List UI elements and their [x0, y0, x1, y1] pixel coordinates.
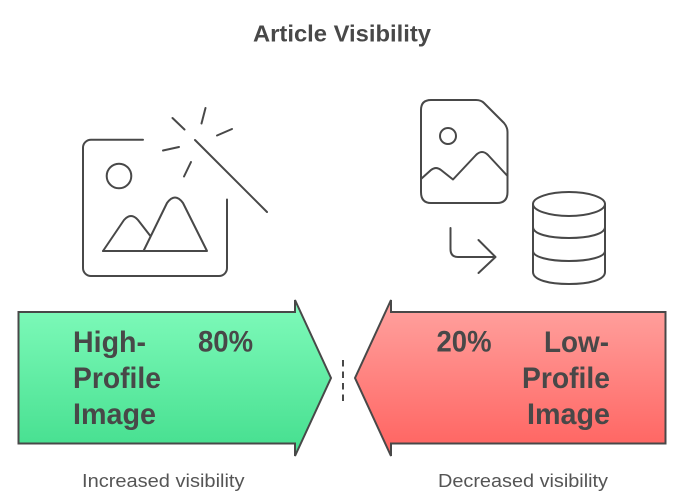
icon: image file	[421, 100, 508, 203]
icon: bent arrow	[450, 228, 496, 273]
icon: image with sparkle	[83, 108, 267, 276]
icon: database	[533, 192, 605, 284]
label: high-profile image: Profile	[73, 362, 161, 395]
caption: decreased visibility: Decreased visibility	[438, 471, 608, 491]
value: 20%: 20%	[436, 326, 492, 358]
center dashed divider	[342, 360, 344, 403]
label: low-profile image: Profile	[522, 362, 610, 395]
label: high-profile image: High-	[73, 326, 146, 359]
label: low-profile image: Low-	[544, 326, 609, 359]
label: high-profile image: Image	[73, 398, 156, 431]
value: 80%: 80%	[198, 326, 253, 358]
green arrow: high-profile image	[18, 300, 331, 456]
title: Article Visibility	[253, 20, 431, 46]
caption: increased visibility: Increased visibility	[82, 471, 244, 491]
red arrow: low-profile image	[355, 300, 666, 456]
label: low-profile image: Image	[527, 398, 610, 431]
